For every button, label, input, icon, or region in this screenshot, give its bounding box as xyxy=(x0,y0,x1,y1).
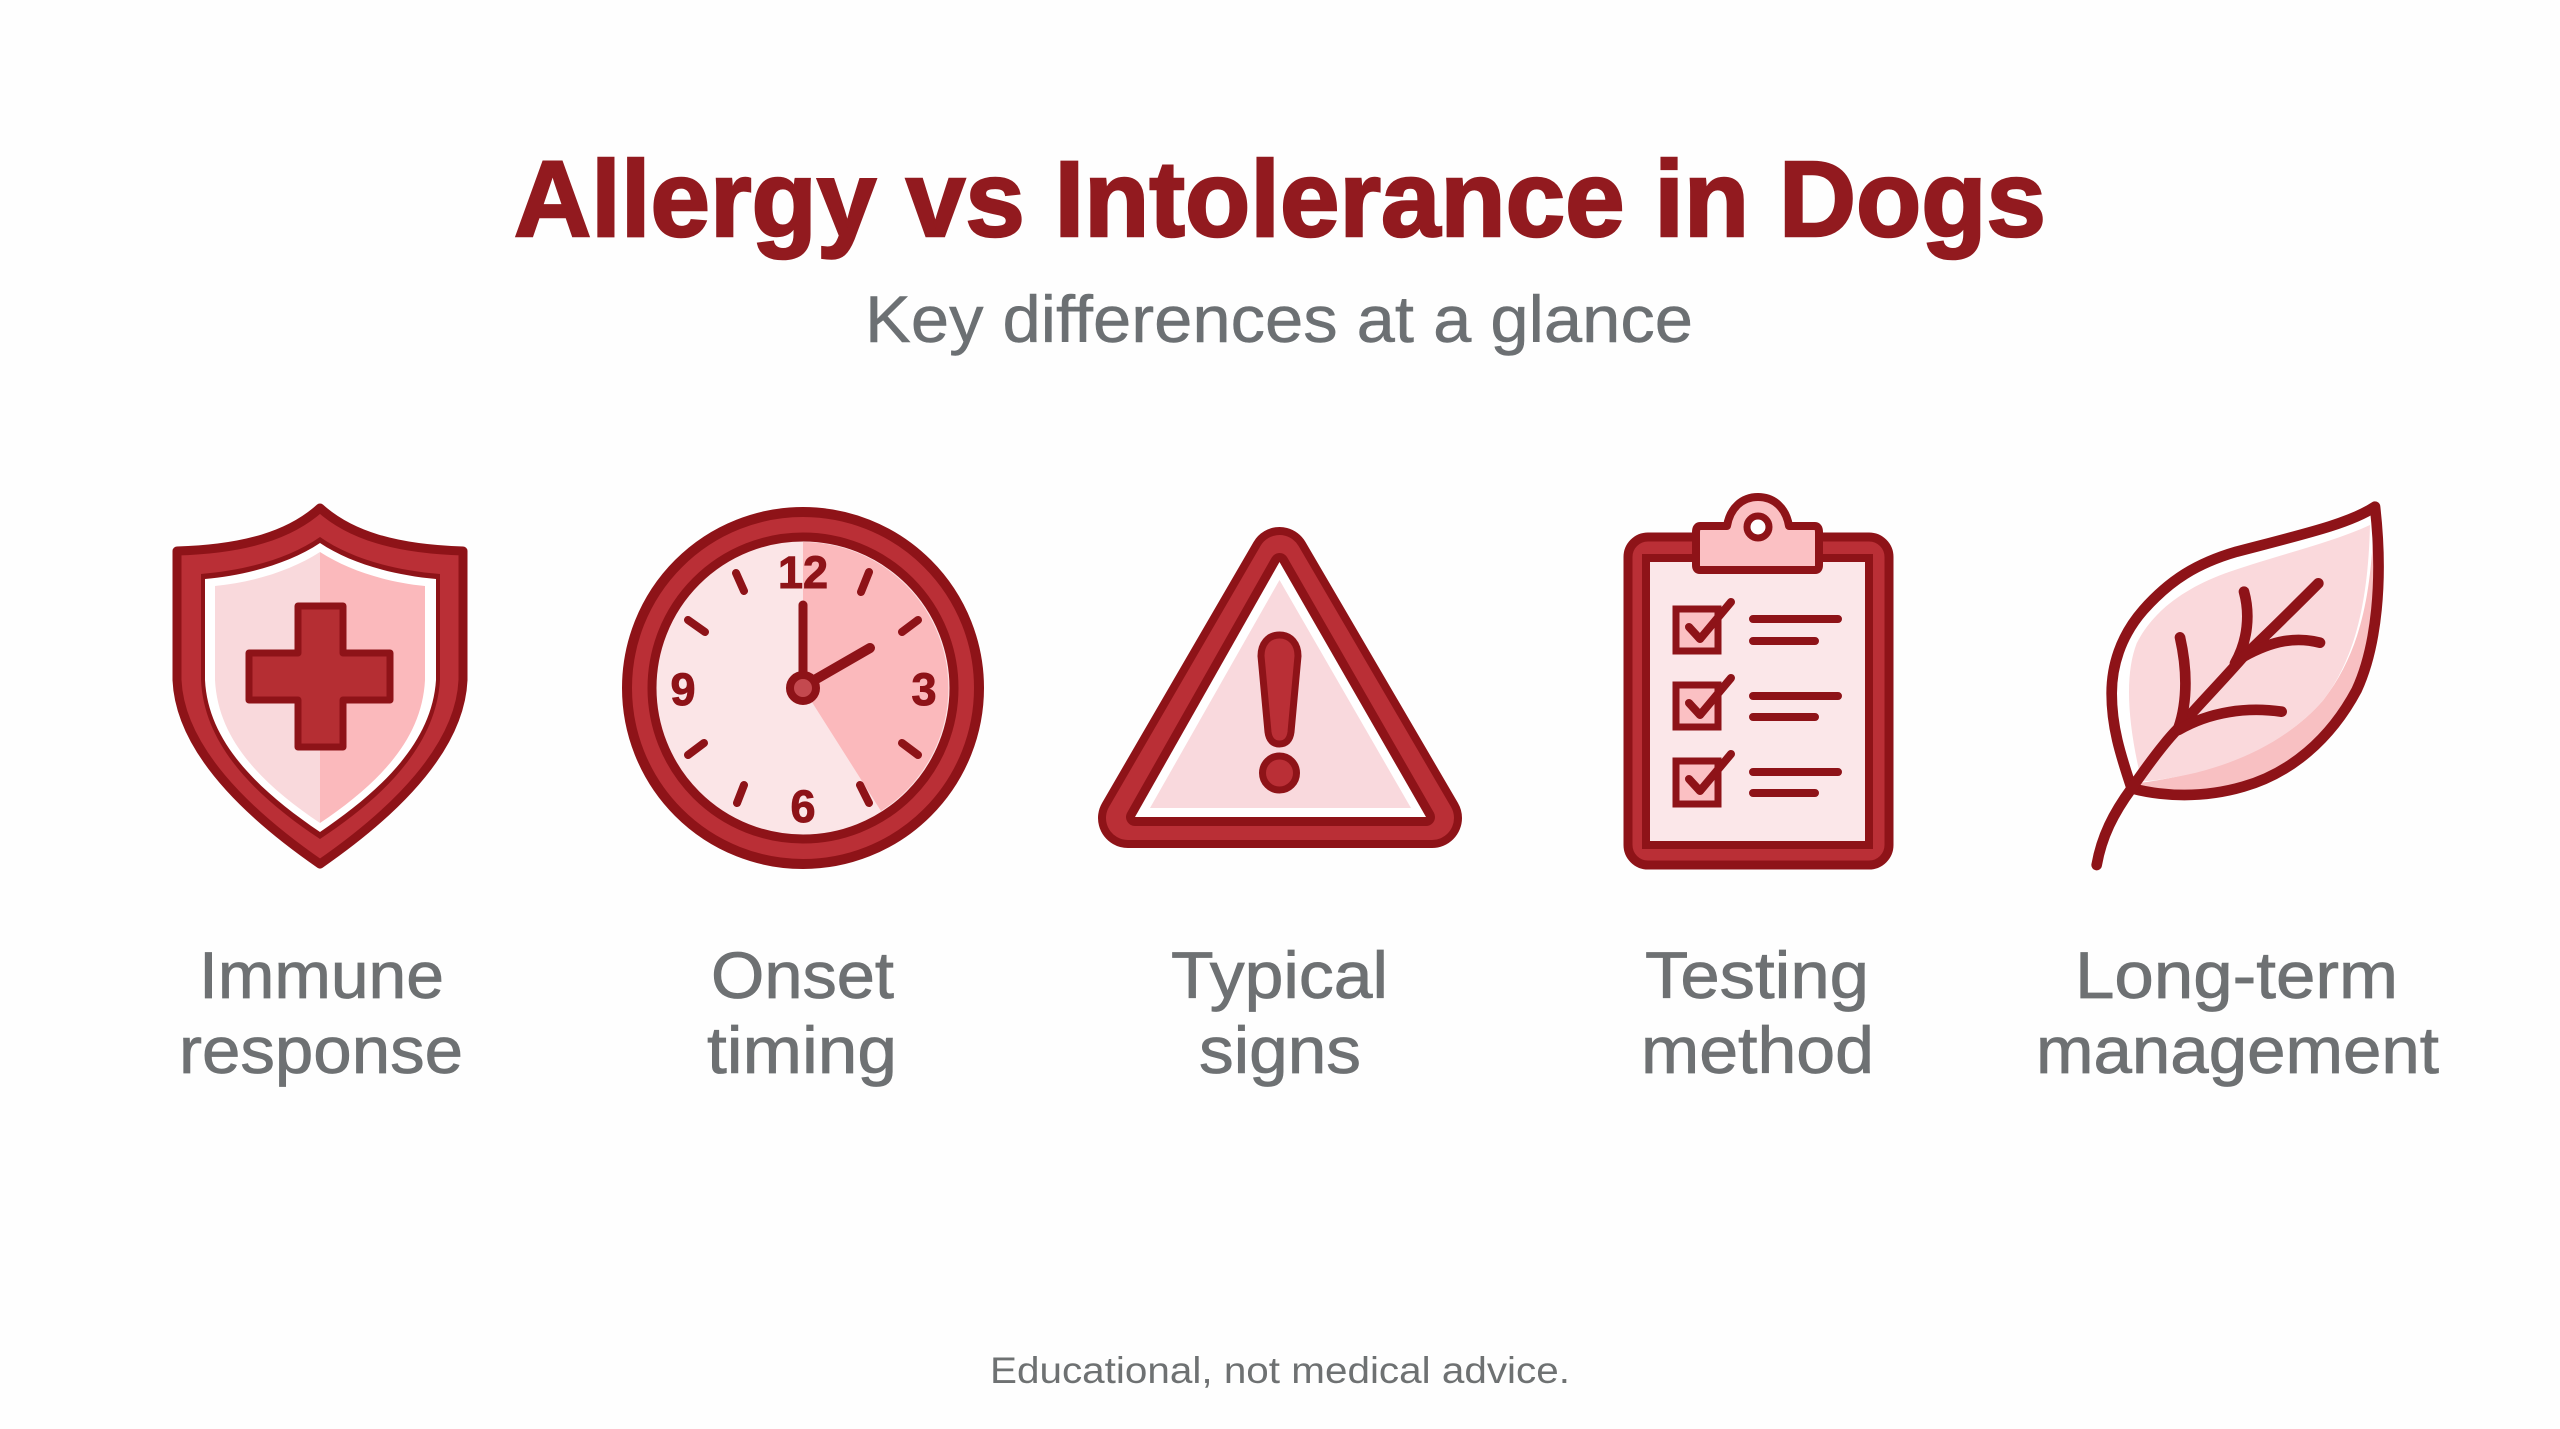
label: immune response xyxy=(179,938,463,1087)
label: onset timing: timing xyxy=(707,1013,897,1087)
label: immune response: response xyxy=(179,1013,463,1087)
icon: clock xyxy=(627,512,979,864)
icon: clipboard checklist xyxy=(1628,497,1889,865)
label: long-term management: Long-term xyxy=(2075,938,2398,1012)
icon: shield with cross xyxy=(177,508,463,864)
icon: clock: 3 xyxy=(911,664,937,715)
label: typical signs: Typical xyxy=(1171,938,1388,1012)
icon: leaf xyxy=(2097,507,2383,865)
label: onset timing xyxy=(707,938,897,1087)
label: typical signs: signs xyxy=(1199,1013,1361,1087)
footer note: Educational, not medical advice. xyxy=(990,1350,1570,1391)
label: long-term management: management xyxy=(2036,1013,2439,1087)
label: long-term management xyxy=(2036,938,2439,1087)
icon: clock: 6 xyxy=(790,781,816,832)
icon: clock: 12 xyxy=(778,547,828,598)
icon: clock: 9 xyxy=(670,664,696,715)
label: typical signs xyxy=(1171,938,1388,1087)
subtitle: Key differences at a glance xyxy=(865,282,1693,356)
label: testing method: Testing xyxy=(1645,938,1869,1012)
label: testing method: method xyxy=(1641,1013,1874,1087)
icon: warning triangle xyxy=(1128,557,1432,818)
label: testing method xyxy=(1641,938,1874,1087)
title: Allergy vs Intolerance in Dogs xyxy=(514,138,2046,259)
label: immune response: Immune xyxy=(199,938,444,1012)
label: onset timing: Onset xyxy=(711,938,894,1012)
